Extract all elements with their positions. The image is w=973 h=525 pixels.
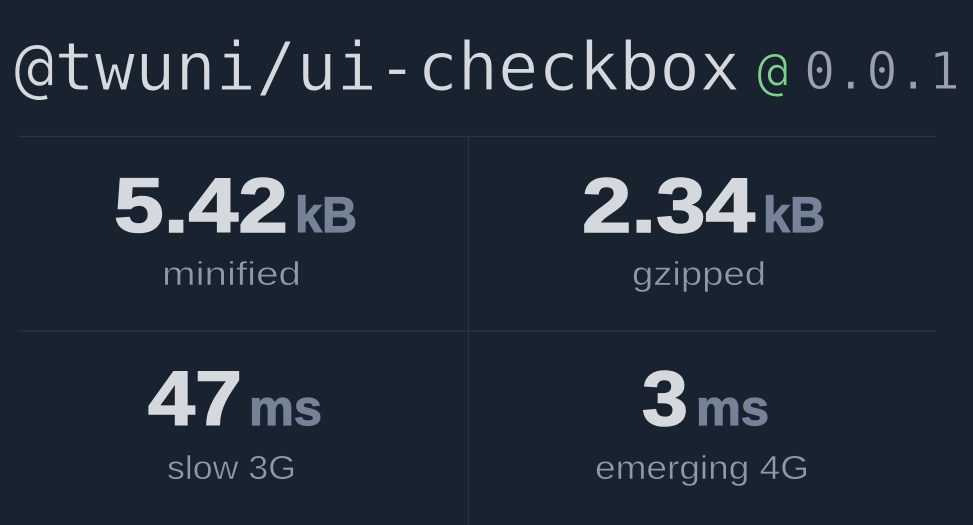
- value: 5.42: [114, 163, 288, 249]
- value: 2.34: [582, 163, 755, 249]
- value: 3: [642, 356, 688, 442]
- version number: 0.0.1: [804, 42, 960, 102]
- package name: @twuni/ui-checkbox: [14, 28, 740, 106]
- unit: ms: [249, 380, 322, 436]
- stat: slow 3G time: [148, 356, 322, 486]
- stat: emerging 4G time: [595, 356, 809, 486]
- stat: minified size: [114, 163, 357, 292]
- version at sign: @: [757, 42, 788, 102]
- unit: kB: [763, 187, 825, 243]
- title: package name and version: [14, 28, 960, 106]
- label: minified: [162, 255, 301, 292]
- label: slow 3G: [167, 449, 296, 486]
- stat: gzipped size: [582, 163, 825, 292]
- value: 47: [148, 356, 242, 442]
- label: emerging 4G: [595, 449, 809, 486]
- unit: kB: [295, 187, 357, 243]
- label: gzipped: [632, 255, 766, 292]
- unit: ms: [696, 380, 769, 436]
